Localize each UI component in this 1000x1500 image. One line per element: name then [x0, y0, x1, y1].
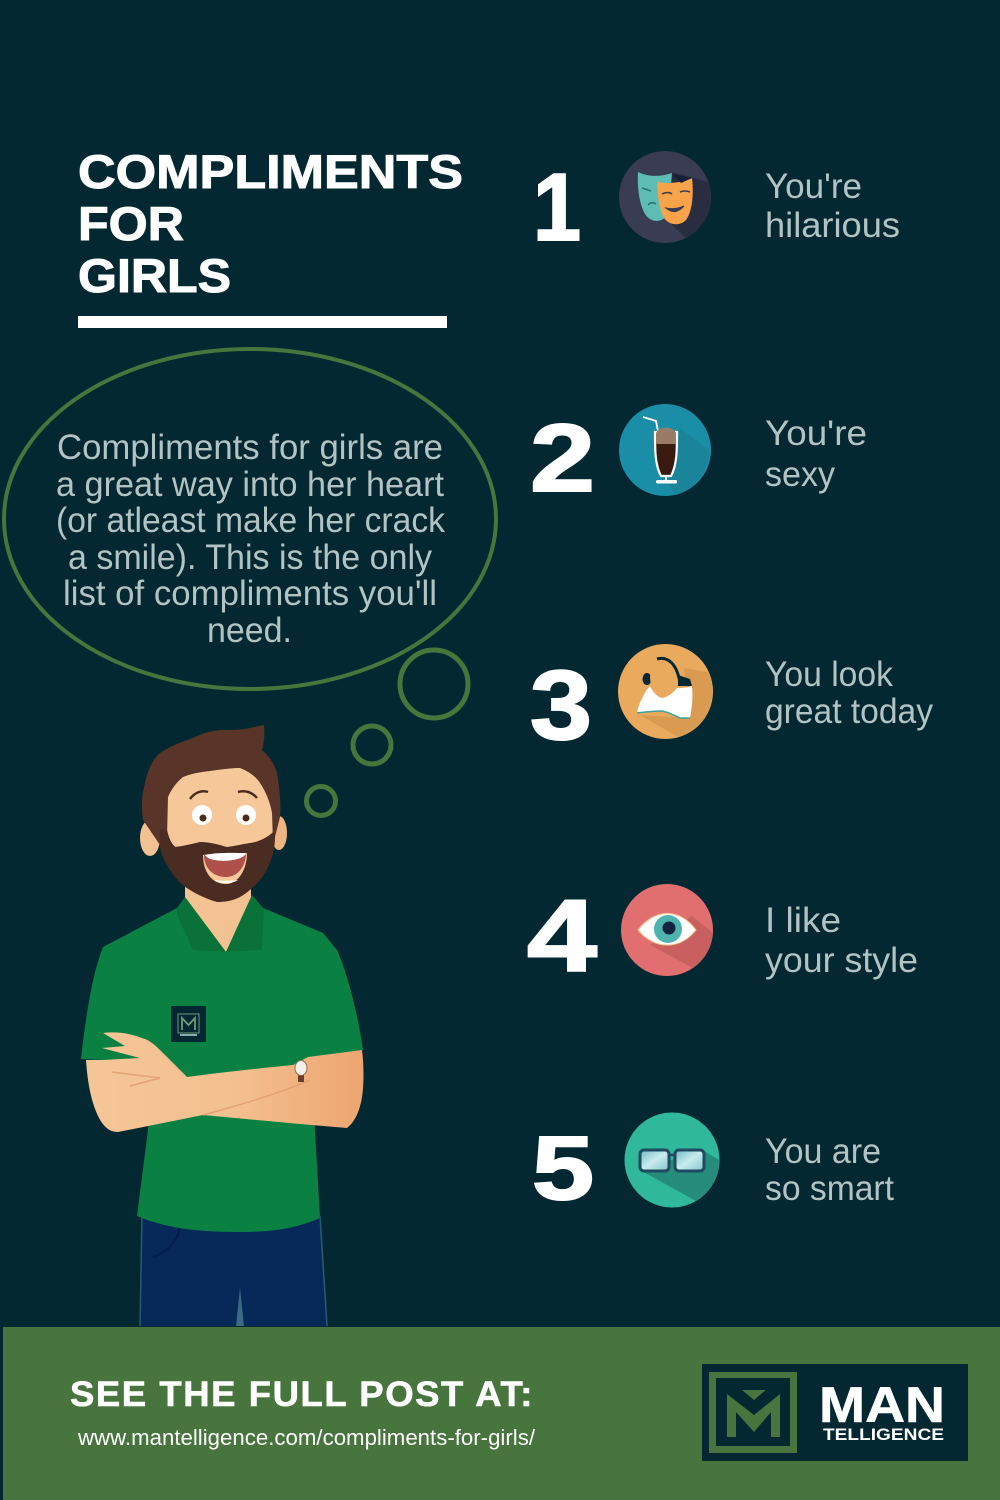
label: hilarious: [765, 206, 900, 245]
label: [765, 167, 900, 245]
mouth: [203, 853, 247, 884]
footer url: www.mantelligence.com/compliments-for-girls/: [77, 1425, 536, 1450]
intro paragraph: Compliments for girls are: [57, 428, 443, 467]
item 1: [533, 151, 900, 261]
intro paragraph: (or atleast make her crack: [56, 501, 445, 540]
wristwatch: [295, 1060, 307, 1082]
eyes: [190, 791, 257, 825]
item 4: [527, 879, 918, 993]
label: sexy: [765, 455, 835, 494]
footer band: [3, 1327, 1000, 1500]
label: [765, 1132, 894, 1208]
label: [765, 901, 918, 980]
item 2: [530, 404, 867, 512]
icon: eye: [621, 884, 713, 976]
number 1: 1: [533, 154, 581, 261]
label: You look: [765, 655, 893, 694]
face: [167, 768, 273, 863]
number 4: 4: [527, 879, 597, 993]
beard: [160, 830, 275, 902]
item 5: [532, 1112, 894, 1219]
character: man with crossed arms: [81, 725, 364, 1326]
chest logo badge: [171, 1006, 206, 1042]
thought bubble: [4, 349, 496, 816]
label: You are: [765, 1132, 881, 1171]
logo: [702, 1364, 968, 1461]
intro paragraph: need.: [207, 611, 292, 650]
number 5: 5: [532, 1119, 594, 1219]
title underline: [78, 316, 447, 328]
crossed arms: [86, 1032, 364, 1132]
item 3: [530, 644, 933, 760]
icon: milkshake glass: [619, 404, 711, 496]
intro paragraph: a great way into her heart: [56, 465, 444, 504]
icon: theatre masks: [619, 151, 711, 243]
logo: TELLIGENCE: [823, 1426, 944, 1444]
footer heading: SEE THE FULL POST AT:: [70, 1375, 534, 1414]
trousers: [140, 1210, 327, 1326]
logo: MAN: [819, 1377, 945, 1433]
title: GIRLS: [78, 249, 231, 302]
label: [765, 414, 867, 494]
ears: [140, 820, 160, 856]
shirt: [81, 895, 363, 1232]
label: You're: [765, 167, 862, 206]
title: FOR: [78, 197, 184, 250]
label: so smart: [765, 1169, 894, 1208]
label: [765, 655, 933, 731]
hair: [142, 725, 280, 845]
label: your style: [765, 941, 918, 980]
icon: person with white collar: [618, 644, 713, 739]
number 3: 3: [530, 650, 592, 760]
shirt collar: [177, 895, 264, 952]
neck: [185, 880, 251, 952]
label: You're: [765, 414, 867, 453]
intro paragraph: [56, 428, 445, 650]
label: great today: [765, 692, 933, 731]
label: I like: [765, 901, 841, 940]
intro paragraph: list of compliments you'll: [63, 574, 437, 613]
title: COMPLIMENTS: [78, 145, 463, 198]
number 2: 2: [530, 405, 595, 512]
icon: glasses: [624, 1112, 720, 1208]
intro paragraph: a smile). This is the only: [68, 538, 432, 577]
title: [78, 145, 463, 302]
